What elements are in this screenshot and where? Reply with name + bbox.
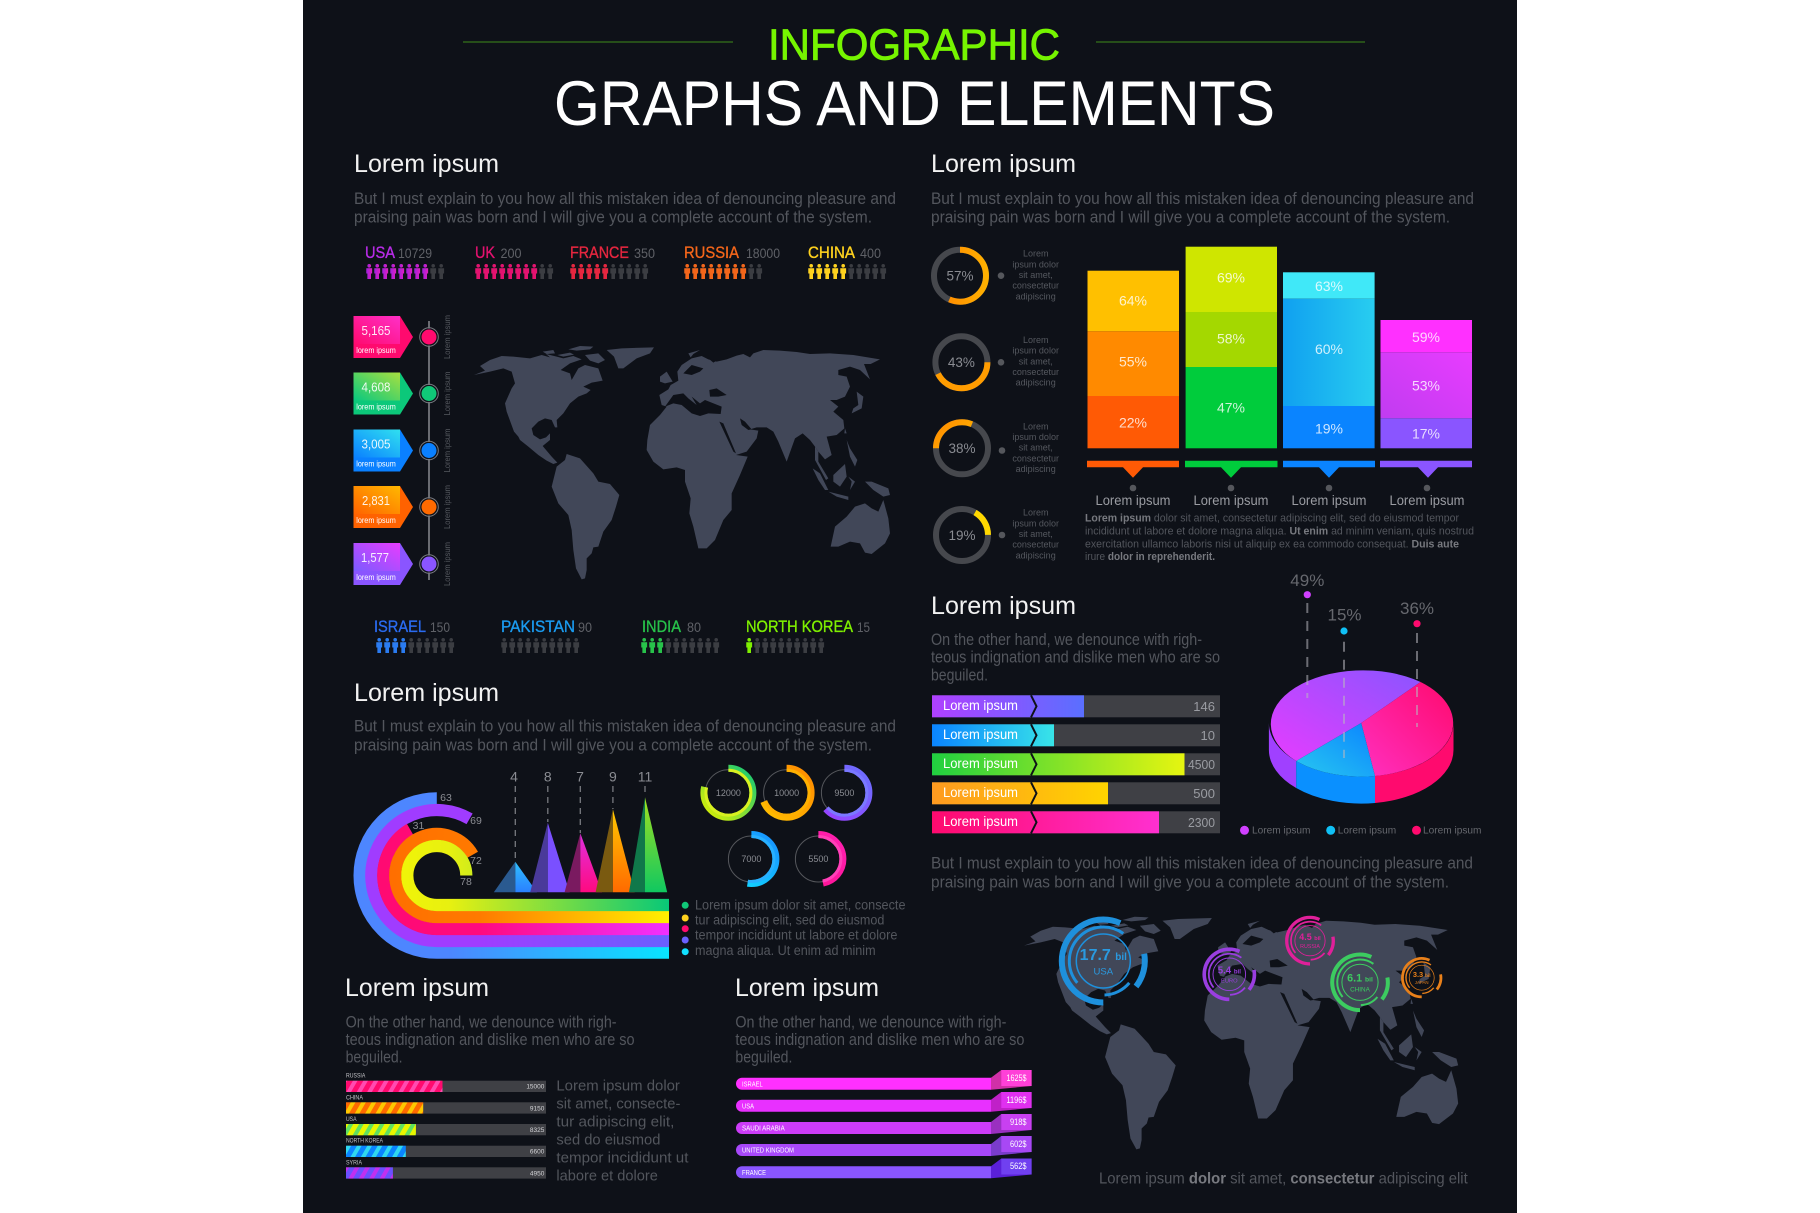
donut 43%: 43% [948,355,975,370]
description text: But I must explain to you how all this mistaken idea of denouncing pleasure and [354,718,896,736]
bullet list: Lorem ipsum dolor sit amet, consecte [695,897,906,912]
striped bar chart: USA [346,1116,357,1123]
rainbow arc chart [360,792,669,953]
value tags: lorem ipsum [356,516,396,525]
small paragraph: exercitation ullamco laboris nisi ut aliquip ex ea commodo consequat. Duis aute [1085,538,1459,550]
marker: Russia [1287,917,1333,964]
stacked bar chart: 58% [1217,330,1245,346]
marker: China: CHINA [1350,986,1371,993]
marker: Euro: 5.4 bil [1218,966,1241,977]
horizontal bar chart: Lorem ipsum [943,814,1018,829]
donut 57% [934,249,1059,302]
country row bottom: 90 [578,619,592,635]
side text: sit amet, consecte- [556,1096,680,1113]
country row bottom: INDIA [642,617,682,636]
side text: sed do eiusmod [556,1132,660,1149]
pyramid chart: 9 [609,769,617,785]
bullet list: tur adipiscing elit, sed do eiusmod [695,912,884,927]
caption: Lorem ipsum dolor sit amet, consectetur adipiscing elit [1099,1170,1468,1187]
striped bar chart: 9150 [530,1105,545,1112]
country row top: 400 [860,245,881,261]
donut 38%: adipiscing [1016,464,1056,474]
small paragraph: incididunt ut labore et dolore magna aliqua. Ut enim ad minim veniam, quis nostrud [1085,525,1474,537]
donut 19%: Lorem [1023,508,1048,518]
value tags: 3,005 [362,436,390,452]
marker: USA: USA [1094,966,1114,978]
heading: Lorem ipsum [354,679,499,707]
stacked bar chart: 60% [1315,341,1343,357]
value tags: lorem ipsum [356,460,396,468]
title: INFOGRAPHIC [768,20,1060,70]
striped bar chart: 6600 [530,1149,545,1156]
pyramid chart: 8 [544,769,552,785]
ribbon chart: 602$ [1010,1139,1027,1150]
dark poster background [303,0,1517,1213]
description below: But I must explain to you how all this mistaken idea of denouncing pleasure and [931,854,1473,872]
country row bottom: NORTH KOREA [746,617,854,636]
value tags: 2,831 [362,493,390,508]
panel: rainbow and pyramids [354,679,906,958]
horizontal bar chart: 500 [1193,786,1215,801]
timeline with dots: Lorem ipsum [442,542,452,586]
heading: Lorem ipsum [354,150,499,178]
country row bottom: 80 [687,619,701,635]
bar pointers and labels [1087,461,1472,508]
rainbow arc chart: 31 [413,820,424,832]
stacked bar chart: 55% [1119,354,1147,370]
title: GRAPHS AND ELEMENTS [554,69,1275,139]
donut 57%: sit amet, [1019,270,1053,280]
country row top: CHINA [808,243,856,262]
description text: beguiled. [735,1049,792,1067]
small ring charts: 9500 [834,788,854,798]
horizontal bar chart [932,695,1220,833]
striped bar chart: 8325 [530,1127,545,1134]
description text [931,631,1220,685]
donut 57%: consectetur [1012,281,1059,291]
bullet list: tempor incididunt ut labore et dolore [695,928,897,943]
small ring charts: 12000 [716,788,741,798]
small ring charts: 5500 [808,854,828,864]
donut 38%: 38% [948,441,976,456]
side text [556,1078,689,1185]
description text: praising pain was born and I will give you a complete account of the system. [354,737,872,755]
donut 19%: sit amet, [1019,529,1053,539]
striped bar chart: NORTH KOREA [346,1138,384,1145]
marker: USA: 17.7 bil [1080,947,1127,964]
rainbow arc chart: 72 [470,855,482,867]
description text [354,718,896,755]
bullet list [682,897,906,958]
donut 43%: sit amet, [1019,356,1053,366]
timeline with dots [420,315,452,586]
description text: But I must explain to you how all this mistaken idea of denouncing pleasure and [931,190,1474,208]
ribbon chart: 562$ [1010,1161,1027,1172]
description text: beguiled. [346,1049,403,1067]
donut 38%: ipsum dolor [1012,432,1059,442]
description text: On the other hand, we denounce with righ- [931,631,1202,649]
horizontal bar chart: 2300 [1188,815,1215,830]
stacked bar chart: 19% [1315,420,1343,436]
donut 19%: 19% [948,528,976,543]
horizontal bar chart: 10 [1201,728,1215,743]
bar pointers and labels: Lorem ipsum [1390,493,1464,508]
striped bar chart: SYRIA [346,1159,363,1166]
value tags [354,316,413,585]
panel: ribbon bars [735,974,1032,1178]
country row top: 350 [634,245,655,261]
stacked bar chart [1088,247,1472,448]
ribbon chart: ISRAEL [742,1081,763,1088]
description text: teous indignation and dislike men who are so [735,1031,1024,1049]
3D pie chart: Lorem ipsum [1338,824,1396,836]
marker: Japan [1402,958,1441,997]
description text: But I must explain to you how all this mistaken idea of denouncing pleasure and [354,190,896,208]
timeline with dots: Lorem ipsum [442,428,452,472]
small paragraph: irure dolor in reprehenderit. [1085,551,1215,563]
side text: Lorem ipsum dolor [556,1078,680,1095]
heading: Lorem ipsum [345,974,489,1002]
horizontal bar chart: 4500 [1188,757,1215,772]
donut 38%: consectetur [1012,453,1059,463]
donut 43%: consectetur [1012,367,1059,377]
donut 38%: Lorem [1023,421,1048,431]
donut 57%: adipiscing [1016,291,1056,301]
timeline with dots: Lorem ipsum [442,315,452,359]
3D pie chart: Lorem ipsum [1423,824,1482,836]
heading: Lorem ipsum [931,592,1076,620]
small paragraph: Lorem ipsum dolor sit amet, consectetur adipiscing elit, sed do eiusmod tempor [1085,513,1459,525]
ribbon chart: FRANCE [742,1170,766,1177]
3D pie chart: Lorem ipsum [1252,824,1311,836]
marker: China [1332,954,1388,1010]
striped bar chart [346,1072,546,1179]
value tags: lorem ipsum [356,402,396,412]
small ring charts [704,768,869,884]
country row bottom: PAKISTAN [501,617,575,636]
horizontal bar chart: 146 [1193,699,1215,714]
ribbon chart: SAUDI ARABIA [742,1126,785,1133]
marker: Japan: JAPAN [1415,980,1429,985]
panel: striped bars [345,974,689,1185]
ribbon chart [736,1070,1032,1178]
description text [735,1013,1024,1067]
panel: GDP world map [1024,917,1468,1187]
striped bar chart: CHINA [346,1094,364,1101]
stacked bar chart: 47% [1217,400,1245,416]
donut 43% [935,335,1059,388]
stacked bar chart: 53% [1412,378,1440,394]
striped bar chart: 15000 [526,1084,545,1091]
3D pie chart: 49% [1290,571,1324,590]
donut 19%: adipiscing [1016,550,1056,560]
timeline with dots: Lorem ipsum [442,485,452,529]
rainbow arc chart: 63 [440,792,452,804]
striped bar chart: RUSSIA [346,1072,366,1079]
marker: Russia: 4.5 bil [1299,932,1321,942]
timeline with dots: Lorem ipsum [442,372,452,416]
striped bar chart: 4950 [530,1170,545,1177]
country row top: 18000 [746,245,780,261]
horizontal bar chart: Lorem ipsum [943,756,1018,771]
value tags: 1,577 [361,550,389,565]
ribbon chart: UNITED KINGDOM [742,1148,794,1155]
ribbon chart: 1625$ [1006,1073,1027,1084]
ribbon chart: 918$ [1010,1117,1027,1128]
country row top [365,243,886,279]
country row bottom: ISRAEL [374,617,426,636]
country row bottom: 150 [430,619,450,635]
heading: Lorem ipsum [931,150,1076,178]
small paragraph [1085,513,1474,563]
bar pointers and labels: Lorem ipsum [1292,493,1366,508]
marker: Euro [1204,949,1254,999]
value tags: lorem ipsum [356,346,396,355]
donut 57%: ipsum dolor [1012,259,1059,269]
ribbon chart: USA [742,1103,754,1110]
rainbow arc chart: 69 [470,815,482,827]
pyramid chart: 11 [638,769,652,785]
panel: world population map [354,150,896,653]
stacked bar chart: 69% [1217,269,1245,285]
description text: teous indignation and dislike men who are so [931,649,1220,667]
panel: stacked bars and donuts [926,150,1474,571]
marker: China: 6.1 bil [1347,973,1373,985]
donut 38% [936,421,1059,474]
description text: praising pain was born and I will give you a complete account of the system. [931,209,1450,227]
marker: USA [1062,920,1145,1002]
marker: Russia: RUSSIA [1300,944,1320,950]
stacked bar chart: 63% [1315,278,1343,294]
stacked bar chart: 17% [1412,425,1440,441]
marker: Euro: EURO [1221,978,1238,984]
panel: horizontal bars and pie [931,571,1482,891]
country row bottom [374,617,870,653]
marker: Japan: 3.3 bil [1413,970,1431,979]
donut 19%: consectetur [1012,540,1059,550]
country row top: 200 [500,245,522,261]
stacked bar chart: 64% [1119,293,1147,309]
country row top: FRANCE [570,243,629,262]
donut 43%: Lorem [1023,335,1048,345]
small ring charts: 10000 [774,788,799,798]
value tags: lorem ipsum [356,573,396,582]
pyramid chart [494,769,667,892]
country row bottom: 15 [857,619,870,635]
rainbow arc chart: 78 [460,876,472,888]
bar pointers and labels: Lorem ipsum [1194,493,1268,508]
3D pie chart [1240,571,1482,836]
value tags: 4,608 [362,380,390,394]
description text: teous indignation and dislike men who are so [346,1031,635,1049]
donut 43%: ipsum dolor [1012,346,1059,356]
description text: praising pain was born and I will give you a complete account of the system. [354,209,872,227]
stacked bar chart: 59% [1412,329,1440,345]
country row top: UK [475,243,496,262]
stacked bar chart: 22% [1119,414,1147,430]
horizontal bar chart: Lorem ipsum [943,727,1018,742]
value tags: 5,165 [362,323,390,338]
world map [474,346,890,579]
3D pie chart: 15% [1327,606,1362,625]
3D pie chart: 36% [1400,599,1434,618]
horizontal bar chart: Lorem ipsum [943,785,1018,800]
side text: labore et dolore [556,1168,658,1185]
side text: tur adipiscing elit, [556,1114,674,1131]
description text: On the other hand, we denounce with righ- [346,1013,617,1031]
world map [1024,917,1458,1149]
heading: Lorem ipsum [735,974,879,1002]
description text: beguiled. [931,667,988,685]
bar pointers and labels: Lorem ipsum [1096,493,1170,508]
horizontal bar chart: Lorem ipsum [943,698,1018,713]
donut 57%: 57% [946,268,974,284]
description text: On the other hand, we denounce with righ- [735,1013,1006,1031]
donut 19%: ipsum dolor [1012,518,1059,528]
description below: praising pain was born and I will give you a complete account of the system. [931,873,1449,891]
donut 57%: Lorem [1023,249,1048,259]
pyramid chart: 7 [576,769,584,785]
donut 38%: sit amet, [1019,443,1053,453]
pyramid chart: 4 [510,769,518,785]
ribbon chart: 1196$ [1006,1095,1027,1106]
description below [931,854,1473,891]
title [463,20,1365,139]
country row top: 10729 [398,245,432,261]
country row top: USA [365,243,396,262]
description text [346,1013,635,1067]
country row top: RUSSIA [684,243,740,262]
small ring charts: 7000 [741,854,761,864]
donut 43%: adipiscing [1016,378,1056,388]
side text: tempor incididunt ut [556,1150,689,1167]
bullet list: magna aliqua. Ut enim ad minim [695,943,876,958]
donut 19% [926,499,1059,571]
